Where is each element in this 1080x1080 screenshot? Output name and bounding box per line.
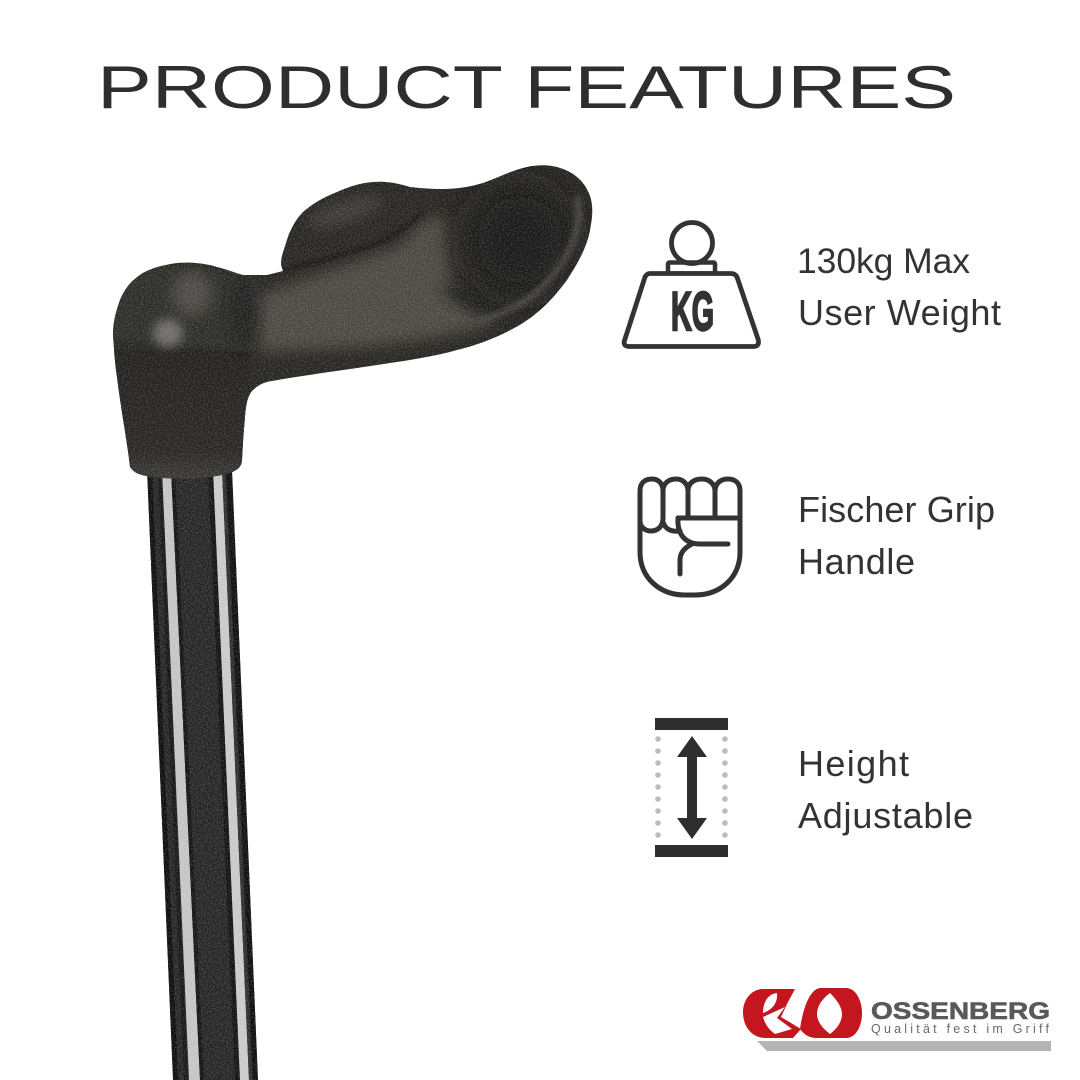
icon: fist	[640, 479, 740, 595]
handle: neck shadow	[231, 274, 255, 350]
title: PRODUCT FEATURES	[97, 54, 956, 121]
logo: Ossenberg: OSSENBERG	[871, 998, 1050, 1025]
logo: Ossenberg: Qualität fest im Griff	[871, 1022, 1050, 1036]
handle: knob highlights	[172, 272, 212, 316]
handle: upper right rim	[478, 196, 579, 322]
icon: height adjustable	[655, 718, 728, 857]
feature text: weight: 130kg Max	[797, 241, 970, 281]
feature text: height	[798, 743, 973, 836]
handle: palm saddle highlight	[258, 215, 498, 352]
feature text: height: Adjustable	[798, 795, 973, 836]
product image: ergonomic handle	[105, 160, 600, 485]
handle: rear thumb lobe sheen	[308, 194, 382, 230]
feature text: grip: Fischer Grip	[798, 489, 995, 530]
handle: knob upper tone	[113, 263, 243, 344]
handle: collar shading	[110, 350, 250, 482]
feature text: weight	[797, 241, 1001, 333]
feature text: grip	[798, 489, 995, 582]
feature text: height: Height	[798, 743, 909, 784]
icon: weight	[624, 222, 758, 346]
product image: walking stick shaft	[147, 472, 258, 1080]
feature text: grip: Handle	[798, 541, 915, 582]
logo: Ossenberg	[743, 988, 1051, 1051]
feature text: weight: User Weight	[798, 292, 1001, 333]
handle: palm hollow	[464, 182, 576, 298]
icon: weight: KG	[671, 280, 714, 342]
handle: crease between lobe and bar	[283, 212, 422, 270]
